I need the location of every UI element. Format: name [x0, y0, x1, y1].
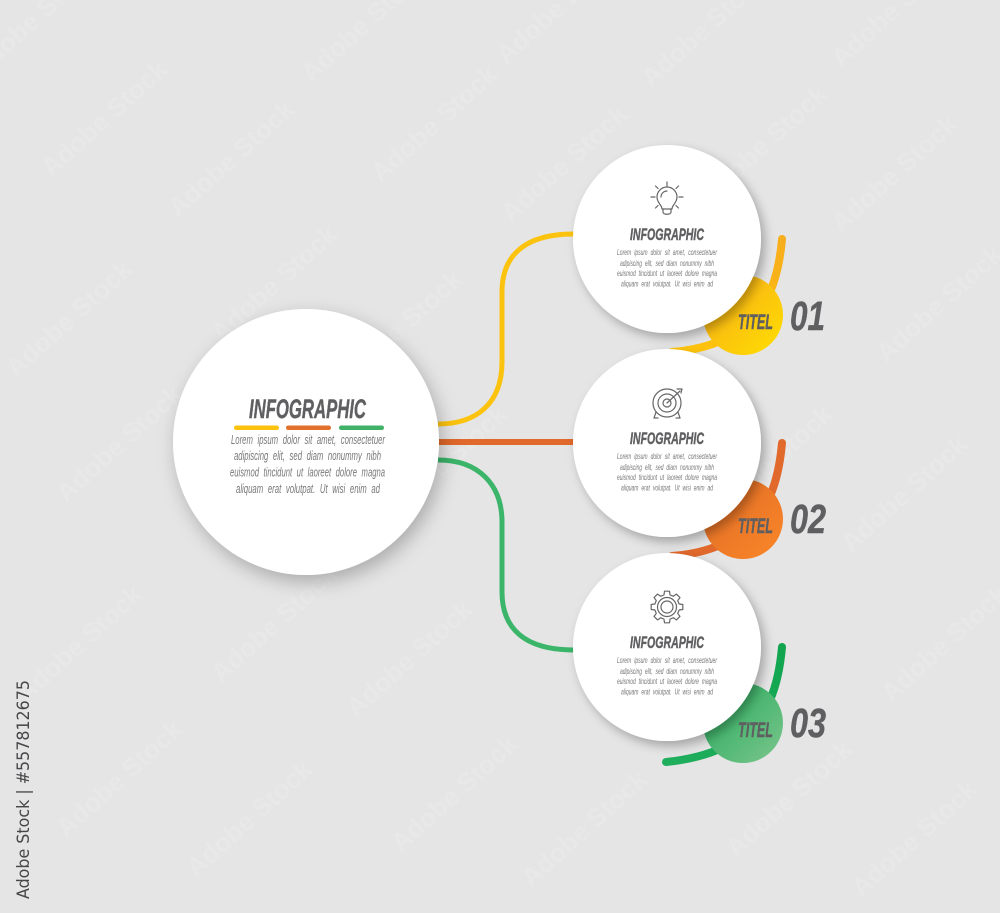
colour bars [234, 426, 384, 430]
step 2 label: TITEL [738, 515, 773, 538]
step 3 circle panel [573, 553, 761, 741]
watermark pattern: Adobe Stock [35, 54, 173, 183]
step 2 body text: adipiscing elit, sed diam nonummy nibh [620, 463, 714, 472]
step 1 heading: INFOGRAPHIC [630, 225, 704, 244]
watermark pattern: Adobe Stock [0, 254, 138, 383]
watermark pattern: Adobe Stock [50, 714, 188, 843]
step 2 number: 02 [790, 496, 826, 542]
step 2 body text [617, 452, 717, 492]
watermark pattern: Adobe Stock [365, 59, 503, 188]
watermark pattern: Adobe Stock [515, 764, 653, 893]
step 3 number: 03 [790, 700, 826, 746]
main body text [230, 433, 386, 496]
connector: green line [438, 460, 574, 650]
step 1 body text: euismod tincidunt ut laoreet dolore magna [617, 269, 717, 278]
connector: yellow line [438, 234, 574, 424]
step 2 body text: Lorem ipsum dolor sit amet, consectetuer [617, 452, 717, 461]
main body text: aliquam erat volutpat. Ut wisi enim ad [236, 482, 381, 496]
step 2 heading: INFOGRAPHIC [630, 429, 704, 448]
step 1 number: 01 [790, 293, 825, 339]
step 3 accent: green arc and circle [666, 647, 783, 763]
step 1 label: TITEL [738, 311, 773, 334]
vertical stock credit: Adobe Stock | #557812675 [14, 680, 34, 899]
watermark pattern: Adobe Stock [205, 559, 343, 688]
step 2 body text: euismod tincidunt ut laoreet dolore magna [617, 473, 717, 482]
watermark pattern: Adobe Stock [720, 734, 858, 863]
watermark pattern: Adobe Stock [180, 754, 318, 883]
step 3 label: TITEL [738, 719, 773, 742]
watermark pattern: Adobe Stock [825, 109, 963, 238]
step 3 body text: aliquam erat volutpat. Ut wisi enim ad [621, 688, 713, 696]
watermark pattern: Adobe Stock [10, 579, 148, 708]
watermark pattern: Adobe Stock [385, 729, 523, 858]
watermark pattern: Adobe Stock [495, 99, 633, 228]
watermark pattern: Adobe Stock [330, 264, 468, 393]
step 1 body text: Lorem ipsum dolor sit amet, consectetuer [617, 248, 717, 257]
step 1 body text [617, 248, 717, 288]
main heading: INFOGRAPHIC [249, 394, 366, 424]
icon: target [653, 389, 682, 418]
icon: gear [651, 591, 683, 623]
watermark pattern: Adobe Stock [700, 399, 838, 528]
step 2 circle panel [573, 349, 761, 537]
connector: orange line [438, 439, 574, 445]
watermark pattern: Adobe Stock [162, 94, 300, 223]
step 3 heading: INFOGRAPHIC [630, 633, 704, 652]
watermark pattern: Adobe Stock [835, 429, 973, 558]
main body text: Lorem ipsum dolor sit amet, consectetuer [231, 433, 386, 447]
step 3 body text: Lorem ipsum dolor sit amet, consectetuer [617, 656, 717, 665]
watermark pattern: Adobe Stock [845, 774, 983, 903]
step 2 body text: aliquam erat volutpat. Ut wisi enim ad [621, 484, 713, 492]
watermark pattern: Adobe Stock [695, 79, 833, 208]
step 3 body text: euismod tincidunt ut laoreet dolore magna [617, 677, 717, 686]
watermark pattern: Adobe Stock [340, 594, 478, 723]
main circle panel [173, 309, 439, 575]
main body text: adipiscing elit, sed diam nonummy nibh [234, 449, 381, 463]
step 1 accent: yellow arc and circle [672, 239, 783, 355]
step 3 body text: adipiscing elit, sed diam nonummy nibh [620, 667, 714, 676]
step 3 body text [617, 656, 717, 696]
watermark pattern: Adobe Stock [50, 379, 188, 508]
step 1 circle panel [573, 145, 761, 333]
watermark pattern: Adobe Stock [205, 219, 343, 348]
step 1 body text: adipiscing elit, sed diam nonummy nibh [620, 259, 714, 268]
step 2 accent: orange arc and circle [672, 443, 783, 559]
icon: light bulb [651, 182, 683, 214]
main body text: euismod tincidunt ut laoreet dolore magna [230, 466, 385, 480]
watermark pattern: Adobe Stock [375, 399, 513, 528]
step 1 body text: aliquam erat volutpat. Ut wisi enim ad [621, 280, 713, 288]
